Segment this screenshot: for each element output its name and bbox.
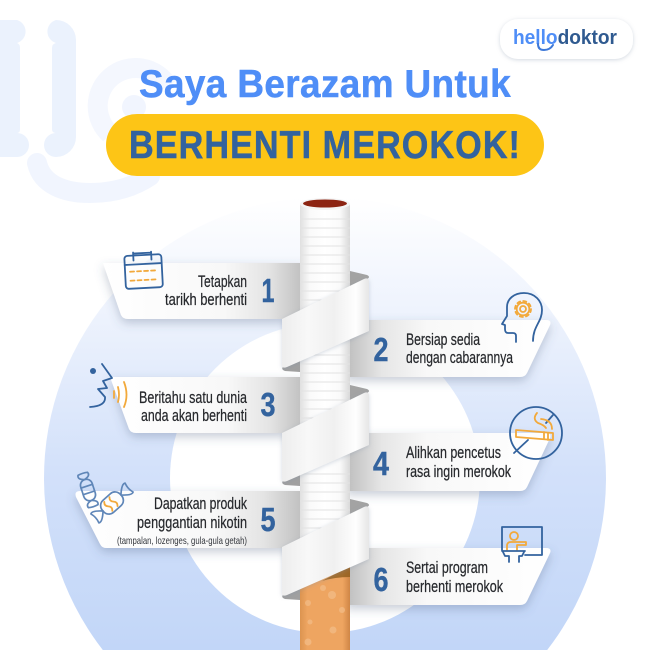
ribbon body bbox=[282, 506, 369, 596]
ribbon fold upper bbox=[350, 499, 369, 518]
banner 6 bbox=[345, 548, 550, 605]
background inner white circle bbox=[170, 323, 480, 633]
icon: speaking face bbox=[90, 364, 126, 407]
logo stethoscope mark bbox=[538, 44, 553, 50]
background large circle bbox=[44, 197, 606, 650]
icon: no smoking bbox=[510, 407, 562, 459]
icon: head with gear bbox=[502, 293, 542, 342]
step 1 number: 1 bbox=[262, 272, 274, 309]
banner 2 bbox=[345, 320, 550, 377]
filter speckles bbox=[304, 585, 345, 646]
step 5: penggantian nikotin bbox=[137, 514, 247, 532]
cigarette top rim bbox=[300, 198, 350, 210]
step 4 number: 4 bbox=[373, 445, 390, 482]
ring centre bbox=[122, 95, 146, 119]
ribbon body bbox=[282, 278, 369, 368]
candy lower bbox=[90, 482, 134, 524]
step 3: anda akan berhenti bbox=[141, 407, 247, 425]
cigarette bbox=[300, 198, 350, 650]
filter shadow under ribbon bbox=[322, 566, 350, 581]
title: Saya Berazam Untuk bbox=[139, 63, 511, 106]
step 6 number: 6 bbox=[374, 561, 388, 598]
icon: candies bbox=[77, 472, 134, 524]
ribbon fold lower bbox=[282, 472, 300, 486]
step 5 note: (tampalan, lozenges, gula-gula getah) bbox=[117, 535, 247, 547]
cigarette filter bbox=[300, 565, 350, 650]
headline text: BERHENTI MEROKOK! bbox=[129, 124, 521, 167]
banner 3 bbox=[110, 377, 305, 433]
banner 5 bbox=[76, 491, 305, 548]
candy upper bbox=[77, 472, 99, 508]
decorative stethoscope watermark bbox=[0, 20, 168, 193]
ribbon fold lower bbox=[282, 586, 300, 600]
wrapped ribbon 1 bbox=[282, 271, 369, 372]
left tube bbox=[0, 20, 29, 157]
step 2 bbox=[374, 331, 514, 368]
step 6: berhenti merokok bbox=[406, 578, 504, 596]
step 6 bbox=[374, 559, 504, 598]
wrapped ribbon 3 bbox=[282, 499, 369, 600]
step 5 number: 5 bbox=[260, 501, 276, 538]
ribbon fold upper bbox=[350, 385, 369, 404]
icon: presenter at board bbox=[502, 527, 542, 562]
step 1 text: Tetapkan bbox=[198, 273, 247, 291]
step 2: dengan cabarannya bbox=[406, 349, 514, 367]
step 5 bbox=[117, 495, 276, 547]
step 2 text: Bersiap sedia bbox=[406, 331, 481, 349]
ribbon fold lower bbox=[282, 358, 300, 372]
logo text: hellodoktor bbox=[513, 27, 617, 49]
step 3 number: 3 bbox=[260, 386, 276, 423]
tobacco bbox=[303, 200, 347, 208]
cigarette paper bbox=[300, 204, 350, 580]
step 4: rasa ingin merokok bbox=[406, 463, 512, 481]
icon: calendar bbox=[124, 251, 163, 289]
lower arc bbox=[37, 163, 150, 193]
cigarette paper stripes bbox=[300, 219, 350, 537]
step 3 text: Beritahu satu dunia bbox=[139, 389, 248, 407]
step 1 bbox=[165, 272, 274, 309]
right tube bbox=[44, 20, 76, 157]
banner 4 bbox=[345, 433, 550, 491]
ribbon fold upper bbox=[350, 271, 369, 290]
headline pill bbox=[106, 114, 544, 176]
step 2 number: 2 bbox=[374, 331, 388, 368]
logo badge bbox=[500, 19, 633, 59]
step 4 text: Alihkan pencetus bbox=[406, 444, 501, 462]
step 5 text: Dapatkan produk bbox=[154, 495, 248, 513]
wrapped ribbon 2 bbox=[282, 385, 369, 486]
step 3 bbox=[139, 386, 276, 425]
step 6 text: Sertai program bbox=[406, 559, 488, 577]
step 1: tarikh berhenti bbox=[165, 291, 247, 309]
ribbon body bbox=[282, 392, 369, 482]
banner 1 bbox=[103, 263, 305, 319]
ring bbox=[98, 68, 168, 134]
step 4 bbox=[373, 444, 512, 482]
